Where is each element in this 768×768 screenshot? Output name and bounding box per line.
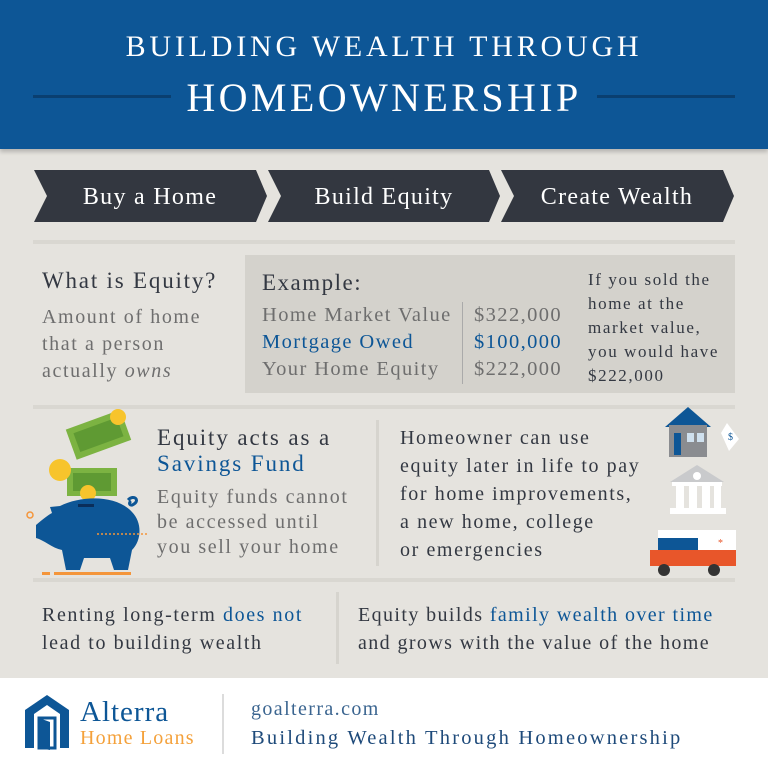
example table: Your Home Equity [262, 358, 440, 380]
uses of equity text: a new home, college [400, 511, 595, 533]
what is equity: that a person [42, 333, 165, 355]
process chevrons [34, 170, 734, 222]
chevron: Buy a Home: Buy a Home [83, 184, 217, 210]
example table [262, 302, 562, 384]
example box [245, 255, 735, 393]
family wealth text: and grows with the value of the home [358, 632, 710, 654]
example table: $222,000 [474, 358, 562, 380]
icon: house with tag [665, 407, 739, 457]
website: goalterra.com [251, 698, 380, 720]
renting text: lead to building wealth [42, 632, 263, 654]
savings fund text: Savings Fund [157, 451, 306, 476]
savings fund text: you sell your home [157, 536, 340, 558]
icon: ambulance: * [718, 538, 723, 549]
example table: Mortgage Owed [262, 331, 414, 353]
note: home at the [588, 294, 685, 313]
family wealth text [358, 604, 714, 654]
family wealth text: Equity builds family wealth over time [358, 604, 714, 626]
savings fund text: Equity funds cannot [157, 486, 348, 508]
uses of equity text: or emergencies [400, 539, 544, 561]
tagline: Building Wealth Through Homeownership [251, 727, 682, 749]
logo [25, 695, 69, 750]
uses of equity text: for home improvements, [400, 483, 632, 505]
icon: bank building [670, 465, 726, 514]
icon: ambulance [650, 530, 736, 576]
chevron: Create Wealth [501, 170, 734, 222]
icon: house with tag: $ [728, 432, 733, 443]
footer [0, 678, 768, 768]
note: $222,000 [588, 366, 665, 385]
icon: piggy bank with money [26, 409, 147, 575]
example box: Example: [262, 270, 362, 295]
what is equity: Amount of home [42, 306, 201, 328]
note: you would have [588, 342, 719, 361]
savings fund text [157, 425, 348, 558]
chevron: Buy a Home [34, 170, 267, 222]
chevron: Create Wealth: Create Wealth [541, 184, 693, 210]
title line 2: HOMEOWNERSHIP [186, 75, 582, 120]
example table: $100,000 [474, 331, 562, 353]
title line 1: BUILDING WEALTH THROUGH [126, 30, 642, 63]
header banner [0, 0, 768, 149]
note [588, 270, 719, 385]
brand name: Alterra [80, 696, 169, 728]
uses of equity text: Homeowner can use [400, 427, 590, 449]
savings fund text: Equity acts as a [157, 425, 331, 450]
uses of equity text: equity later in life to pay [400, 455, 640, 477]
note: If you sold the [588, 270, 711, 289]
renting text [42, 604, 303, 654]
renting text: Renting long-term does not [42, 604, 303, 626]
example table: $322,000 [474, 304, 562, 326]
chevron: Build Equity [268, 170, 500, 222]
uses of equity text [400, 427, 640, 561]
what is equity: What is Equity? [42, 268, 217, 293]
footer: Home Loans [80, 727, 195, 749]
what is equity: actually owns [42, 360, 172, 382]
note: market value, [588, 318, 701, 337]
savings fund text: be accessed until [157, 511, 320, 533]
chevron: Build Equity: Build Equity [315, 184, 453, 210]
what is equity [42, 268, 217, 382]
example table: Home Market Value [262, 304, 452, 326]
